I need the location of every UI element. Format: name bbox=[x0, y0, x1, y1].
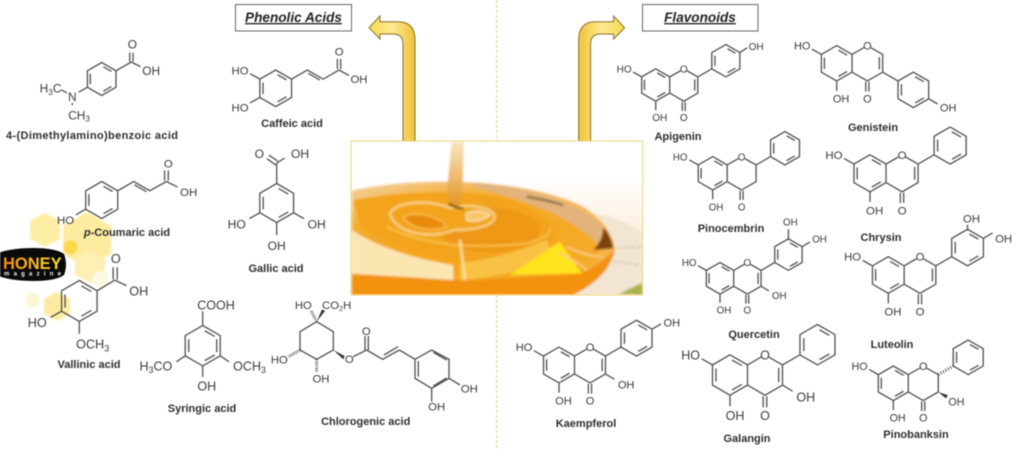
compound: Kaempferol: O bbox=[586, 396, 595, 408]
compound: Syringic acid: COOH bbox=[197, 299, 235, 313]
compound: Gallic acid: HO bbox=[228, 217, 246, 231]
compound: Syringic acid: H bbox=[139, 359, 149, 373]
compound: Chlorogenic acid: OH bbox=[428, 402, 445, 414]
compound: Luteolin: OH bbox=[963, 213, 980, 225]
logo: Honey magazine: magazine bbox=[4, 272, 62, 278]
compound: Chlorogenic acid bbox=[271, 300, 478, 428]
compound: Apigenin: O bbox=[680, 113, 688, 124]
name: Kaempferol: Kaempferol bbox=[556, 418, 616, 430]
compound: Quercetin: OH bbox=[812, 234, 827, 245]
compound: Chrysin: O bbox=[898, 205, 907, 217]
compound: 4-(Dimethylamino)benzoic acid: CH bbox=[68, 108, 85, 122]
compound: 4-(Dimethylamino)benzoic acid: OH bbox=[142, 64, 160, 78]
compound: 4-(Dimethylamino)benzoic acid: C bbox=[53, 82, 62, 96]
compound: Galangin: OH bbox=[726, 409, 744, 423]
name: Luteolin: Luteolin bbox=[871, 339, 914, 351]
name: Galangin: Galangin bbox=[723, 433, 771, 445]
compound: Apigenin: OH bbox=[749, 42, 764, 53]
compound: Vallinic acid: OCH bbox=[76, 338, 104, 352]
compound: Caffeic acid: OH bbox=[350, 74, 367, 86]
compound: Apigenin: O bbox=[680, 64, 688, 75]
compound: 4-(Dimethylamino)benzoic acid: 3 bbox=[85, 115, 90, 124]
compound: Caffeic acid: HO bbox=[232, 103, 249, 115]
compound: Chrysin bbox=[825, 127, 966, 244]
compound: Chrysin: HO bbox=[825, 150, 843, 162]
name: Pinocembrin: Pinocembrin bbox=[698, 223, 765, 235]
heading box: Phenolic Acids bbox=[236, 4, 352, 31]
compound: Galangin: HO bbox=[681, 348, 700, 362]
compound: 4-(Dimethylamino)benzoic acid bbox=[6, 38, 178, 142]
compound: Quercetin: O bbox=[744, 305, 752, 316]
compound: Gallic acid: OH bbox=[291, 147, 309, 161]
compound: Syringic acid: OH bbox=[197, 380, 216, 394]
compound: Caffeic acid: HO bbox=[232, 66, 249, 78]
compound: Pinocembrin: OH bbox=[709, 202, 723, 213]
name: Syringic acid: Syringic acid bbox=[168, 403, 236, 415]
compound: Caffeic acid bbox=[232, 47, 367, 130]
compound: Chlorogenic acid: HO bbox=[271, 354, 288, 366]
compound: Syringic acid: OCH bbox=[233, 359, 261, 373]
compound: Pinobanksin: OH bbox=[890, 413, 906, 425]
compound: 4-(Dimethylamino)benzoic acid: N bbox=[68, 90, 77, 104]
compound: Pinocembrin bbox=[673, 132, 799, 235]
compound: Vallinic acid bbox=[28, 252, 148, 371]
compound: Chlorogenic acid: O bbox=[362, 326, 371, 338]
compound: Pinocembrin: O bbox=[738, 152, 746, 163]
compound: Kaempferol: OH bbox=[618, 380, 634, 392]
compound: Syringic acid: 3 bbox=[261, 365, 266, 375]
compound: Genistein: OH bbox=[833, 94, 849, 106]
compound: Quercetin: HO bbox=[682, 258, 697, 269]
name: Gallic acid: Gallic acid bbox=[248, 263, 304, 275]
name: Vallinic acid: Vallinic acid bbox=[58, 359, 120, 371]
compound: Chlorogenic acid: HO bbox=[295, 300, 312, 312]
compound: Pinobanksin bbox=[852, 340, 983, 441]
compound: Quercetin: O bbox=[744, 258, 752, 269]
compound: Chrysin: OH bbox=[866, 205, 883, 217]
compound: Kaempferol: OH bbox=[555, 396, 572, 408]
compound: Quercetin: OH bbox=[717, 305, 731, 316]
compound: Gallic acid: OH bbox=[308, 217, 326, 231]
compound: Kaempferol bbox=[516, 318, 680, 430]
compound: Gallic acid bbox=[228, 147, 326, 275]
compound: Apigenin bbox=[617, 42, 764, 143]
name: Genistein: Genistein bbox=[848, 122, 898, 134]
name: Apigenin: Apigenin bbox=[654, 131, 702, 143]
compound: Kaempferol: O bbox=[586, 342, 595, 354]
compound: Pinobanksin: O bbox=[919, 361, 927, 373]
name: 4-(Dimethylamino)benzoic acid: 4-(Dimethylamino)benzoic acid bbox=[6, 130, 178, 142]
honeycomb decoration bbox=[26, 212, 111, 321]
compound: p-Coumaric acid bbox=[57, 158, 197, 239]
compound: Pinobanksin: OH bbox=[948, 396, 964, 408]
compound: Gallic acid: OH bbox=[268, 239, 286, 253]
compound: Quercetin: OH bbox=[772, 291, 787, 302]
compound: Luteolin: HO bbox=[844, 252, 861, 264]
compound: p-Coumaric acid: O bbox=[164, 158, 173, 170]
compound: Chlorogenic acid: OH bbox=[461, 383, 478, 395]
compound: Kaempferol: HO bbox=[516, 342, 533, 354]
logo: Honey magazine: HONEY bbox=[3, 255, 62, 273]
compound: Genistein: OH bbox=[940, 102, 957, 114]
compound: Luteolin: O bbox=[916, 252, 925, 264]
compound: Vallinic acid: OH bbox=[129, 284, 148, 298]
heading box: Flavonoids: Flavonoids bbox=[664, 10, 736, 25]
name: Pinobanksin: Pinobanksin bbox=[883, 429, 949, 441]
compound: Genistein: O bbox=[863, 40, 872, 52]
compound: Luteolin: O bbox=[916, 307, 925, 319]
compound: Galangin: O bbox=[760, 348, 770, 362]
compound: Galangin: OH bbox=[796, 391, 815, 405]
compound: 4-(Dimethylamino)benzoic acid: H bbox=[40, 82, 48, 96]
compound: Syringic acid bbox=[139, 299, 266, 415]
compound: Pinocembrin: O bbox=[738, 202, 746, 213]
compound: p-Coumaric acid: OH bbox=[180, 187, 197, 199]
name: Chrysin: Chrysin bbox=[861, 232, 902, 244]
centre dashed divider: lower bbox=[496, 295, 498, 449]
compound: Galangin bbox=[681, 324, 835, 445]
compound: Caffeic acid: O bbox=[335, 47, 344, 59]
compound: Luteolin: OH bbox=[884, 307, 901, 319]
compound: Chrysin: O bbox=[898, 150, 907, 162]
compound: Gallic acid: O bbox=[255, 147, 264, 161]
compound: Apigenin: OH bbox=[652, 113, 667, 124]
compound: 4-(Dimethylamino)benzoic acid: 3 bbox=[48, 88, 53, 97]
name: p-Coumaric acid: p-Coumaric acid bbox=[83, 227, 170, 239]
compound: Pinobanksin: HO bbox=[852, 361, 868, 373]
name: Caffeic acid: Caffeic acid bbox=[261, 118, 323, 130]
compound: Luteolin bbox=[844, 213, 1012, 351]
compound: Chlorogenic acid: CO bbox=[322, 300, 339, 312]
compound: Chlorogenic acid: 2 bbox=[339, 304, 343, 313]
photo: honey pouring onto plate bbox=[351, 141, 643, 295]
compound: Galangin: O bbox=[760, 409, 770, 423]
compound: Kaempferol: OH bbox=[663, 318, 680, 330]
arrow: to phenolic acids bbox=[369, 16, 415, 141]
heading box: Flavonoids bbox=[642, 4, 758, 31]
compound: Syringic acid: 3 bbox=[149, 365, 154, 375]
compound: Pinocembrin: HO bbox=[673, 152, 688, 163]
compound: Chlorogenic acid: H bbox=[343, 300, 351, 312]
name: Chlorogenic acid: Chlorogenic acid bbox=[321, 416, 410, 428]
compound: Quercetin bbox=[682, 217, 827, 341]
centre dashed divider: upper bbox=[496, 0, 498, 141]
compound: Pinobanksin: O bbox=[919, 413, 927, 425]
compound: p-Coumaric acid: HO bbox=[57, 215, 74, 227]
compound: Vallinic acid: HO bbox=[28, 316, 47, 330]
heading box: Phenolic Acids: Phenolic Acids bbox=[245, 10, 342, 25]
compound: Genistein: HO bbox=[794, 40, 810, 52]
compound: Luteolin: OH bbox=[995, 233, 1012, 245]
compound: Genistein bbox=[794, 40, 957, 134]
arrow: to flavonoids bbox=[579, 16, 625, 141]
compound: Apigenin: HO bbox=[617, 64, 632, 75]
compound: Chlorogenic acid: OH bbox=[312, 374, 329, 386]
logo: Honey magazine bbox=[0, 248, 66, 281]
compound: Genistein: O bbox=[863, 94, 872, 106]
compound: Vallinic acid: 3 bbox=[104, 343, 109, 353]
name: Quercetin: Quercetin bbox=[728, 329, 780, 341]
compound: Syringic acid: CO bbox=[153, 359, 172, 373]
compound: 4-(Dimethylamino)benzoic acid: O bbox=[128, 38, 137, 52]
compound: Chlorogenic acid: O bbox=[345, 354, 354, 366]
compound: Quercetin: OH bbox=[783, 217, 798, 228]
compound: Vallinic acid: O bbox=[111, 252, 121, 266]
